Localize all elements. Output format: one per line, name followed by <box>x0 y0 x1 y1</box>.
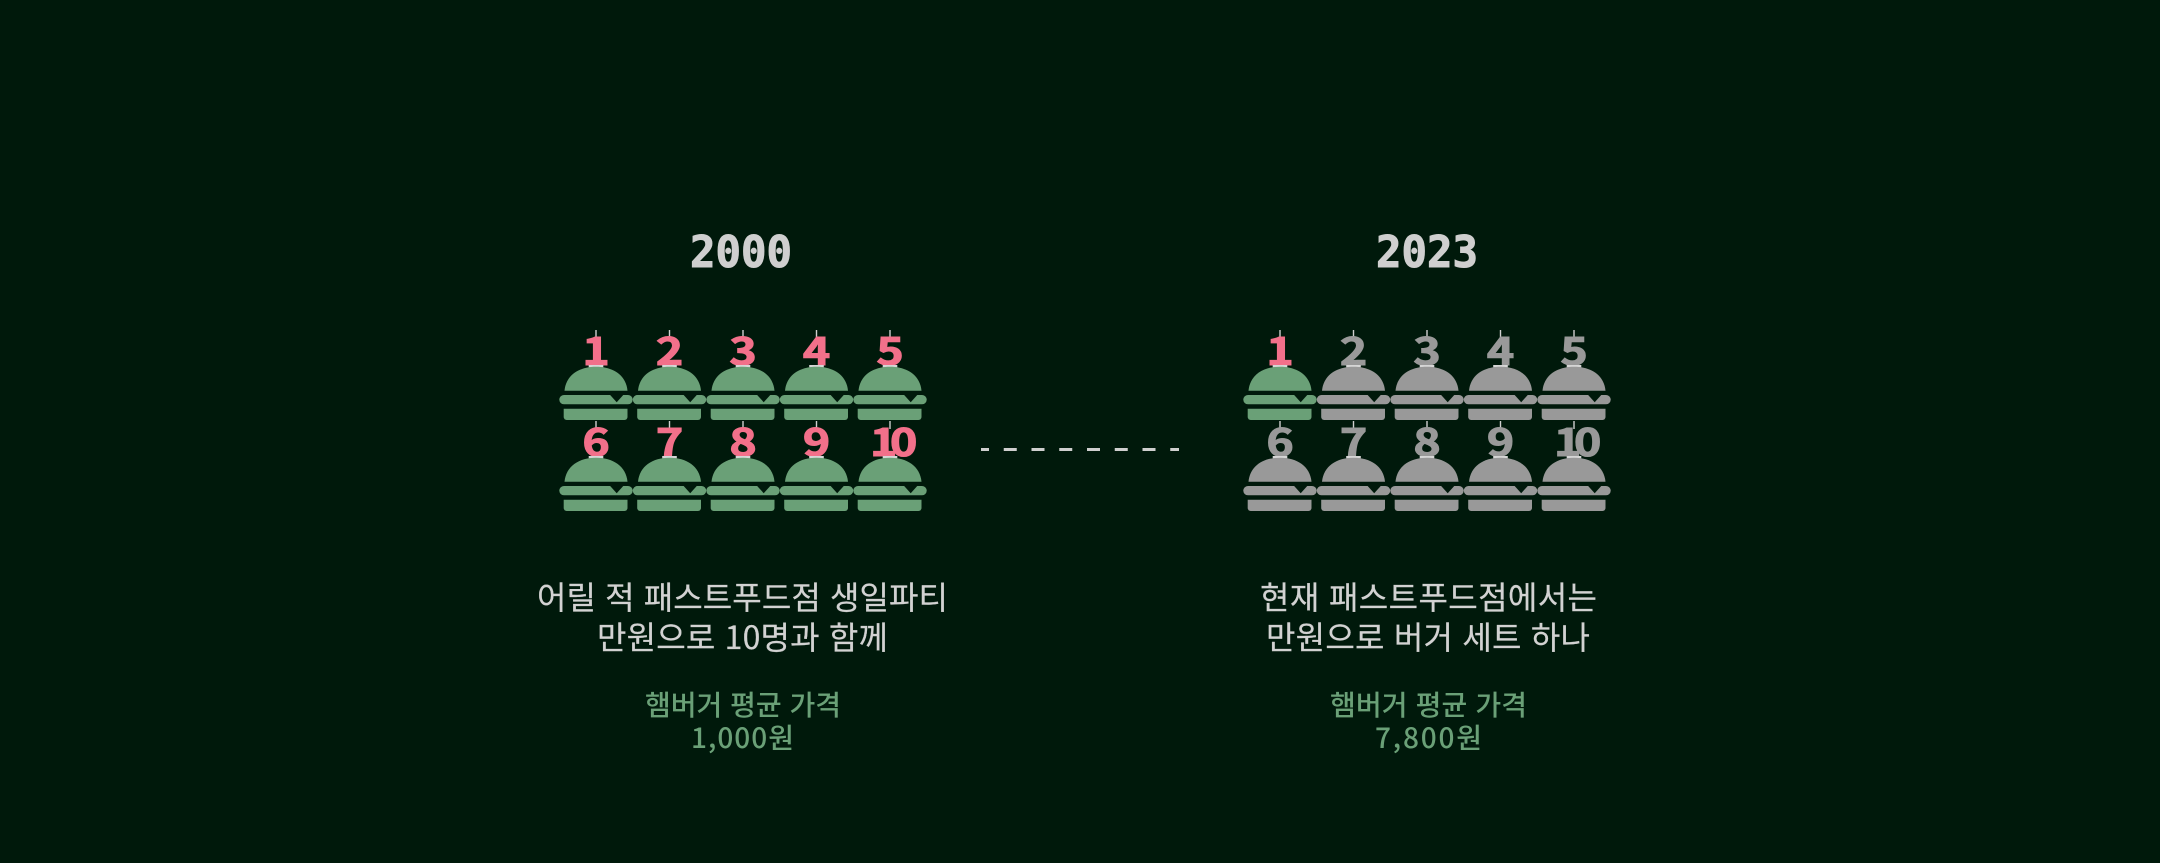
burger 10 <box>853 413 927 511</box>
price 2000: 1,000원 <box>691 717 794 757</box>
burger 4: 4 <box>803 322 830 377</box>
burger 8: 8 <box>729 413 757 468</box>
burger 9 <box>780 413 853 511</box>
burger 6 <box>559 413 633 511</box>
description 2000 <box>537 573 948 659</box>
burger icons 2000 <box>559 322 927 511</box>
burger 1 highlighted <box>1243 322 1317 420</box>
year 2000: 2000 <box>690 227 792 278</box>
burger 2 <box>1317 322 1390 420</box>
burger 3 <box>706 322 780 420</box>
price 2023: 7,800원 <box>1375 717 1482 757</box>
burger 9 <box>1464 413 1537 511</box>
price 2000 <box>645 684 841 757</box>
price 2000: 햄버거 평균 가격 <box>645 684 841 724</box>
dashed connector <box>981 448 1179 451</box>
burger 3: 3 <box>729 322 757 377</box>
panel: 2000 <box>537 227 948 757</box>
burger 8 <box>706 413 780 511</box>
panel: 2023 <box>1243 227 1611 757</box>
burger 8: 8 <box>1413 413 1441 468</box>
burger 7: 7 <box>1340 413 1367 468</box>
burger 2: 2 <box>656 322 683 377</box>
burger 4: 4 <box>1487 322 1514 377</box>
year 2023: 2023 <box>1376 227 1478 278</box>
burger 7 <box>633 413 706 511</box>
description 2023: 현재 패스트푸드점에서는 <box>1260 573 1597 619</box>
burger 2 <box>633 322 706 420</box>
burger 6 <box>1243 413 1317 511</box>
burger 2: 2 <box>1340 322 1367 377</box>
description 2000: 만원으로 10명과 함께 <box>597 613 888 659</box>
burger 5: 5 <box>876 322 904 377</box>
burger 10: 10 <box>1554 413 1600 468</box>
burger 8 <box>1390 413 1464 511</box>
description 2000: 어릴 적 패스트푸드점 생일파티 <box>537 573 948 619</box>
burger 1: 1 <box>582 322 610 377</box>
burger 4 <box>1464 322 1537 420</box>
burger 5 <box>1537 322 1611 420</box>
burger 1 highlighted: 1 <box>1266 322 1294 377</box>
burger 5 <box>853 322 927 420</box>
price 2023: 햄버거 평균 가격 <box>1330 684 1527 724</box>
burger 4 <box>780 322 853 420</box>
burger 1 <box>559 322 633 420</box>
burger 3: 3 <box>1413 322 1441 377</box>
burger icons 2023 <box>1243 322 1611 511</box>
burger 10 <box>1537 413 1611 511</box>
description 2023: 만원으로 버거 세트 하나 <box>1266 613 1590 659</box>
description 2023 <box>1260 573 1597 659</box>
burger 9: 9 <box>803 413 830 468</box>
burger 5: 5 <box>1560 322 1588 377</box>
burger 10: 10 <box>870 413 916 468</box>
price 2023 <box>1330 684 1527 757</box>
burger 6: 6 <box>582 413 610 468</box>
burger 3 <box>1390 322 1464 420</box>
burger 7: 7 <box>656 413 683 468</box>
burger 9: 9 <box>1487 413 1514 468</box>
burger 7 <box>1317 413 1390 511</box>
burger 6: 6 <box>1266 413 1294 468</box>
